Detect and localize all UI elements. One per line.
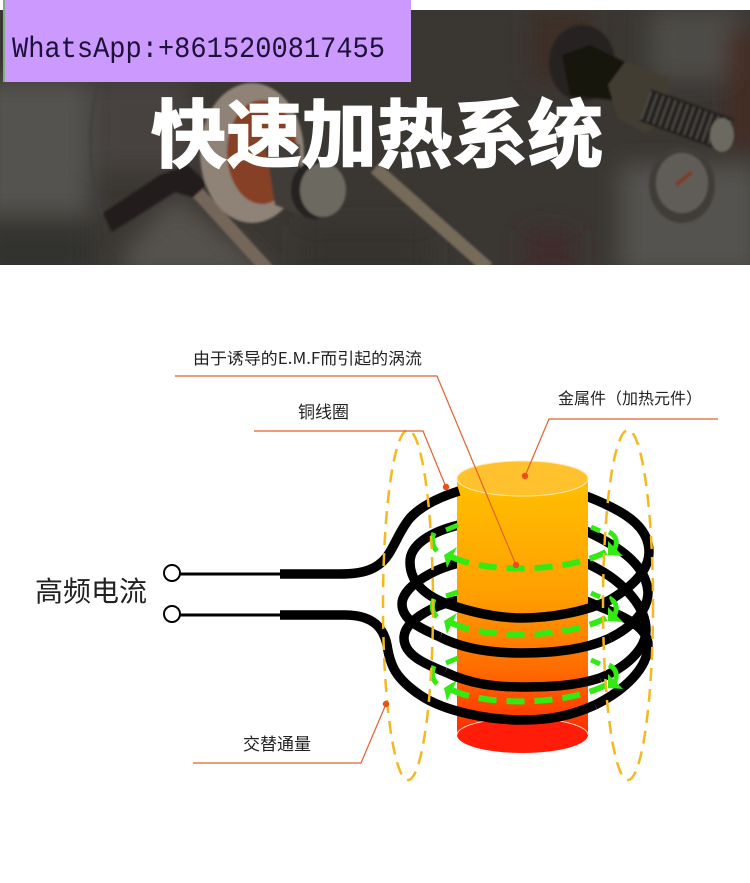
whatsapp contact box: WhatsApp:+8615200817455 [12,33,385,67]
induction heating diagram [35,345,718,780]
leader: metal part [522,419,718,479]
eddy currents [432,525,623,701]
back coil arcs [402,496,649,705]
label: metal part: 金属件（加热元件） [558,385,702,409]
leader: eddy current [175,376,519,568]
label: copper coil: 铜线圈 [298,398,349,423]
wall seam [91,116,103,215]
centre bolt [291,160,319,220]
leader: alternating flux [193,701,389,763]
banner photo [0,10,750,282]
white insulating ring [200,83,304,223]
title: 快速加热系统 [151,94,603,177]
right washer and bolt [549,25,615,101]
cables [198,193,268,270]
label: eddy current: 由于诱导的E.M.F而引起的涡流 [193,345,422,369]
leader: copper coil [254,431,449,490]
alternating flux loops [383,430,653,780]
terminal leads [164,565,282,622]
right disc [648,162,716,224]
metal cylinder [457,461,588,753]
front coil arcs and leads [280,491,610,720]
whatsapp contact box [3,0,411,82]
dark wedge [103,165,207,232]
label: alternating flux: 交替通量 [243,730,311,755]
label: high frequency current: 高频电流 [35,570,147,610]
